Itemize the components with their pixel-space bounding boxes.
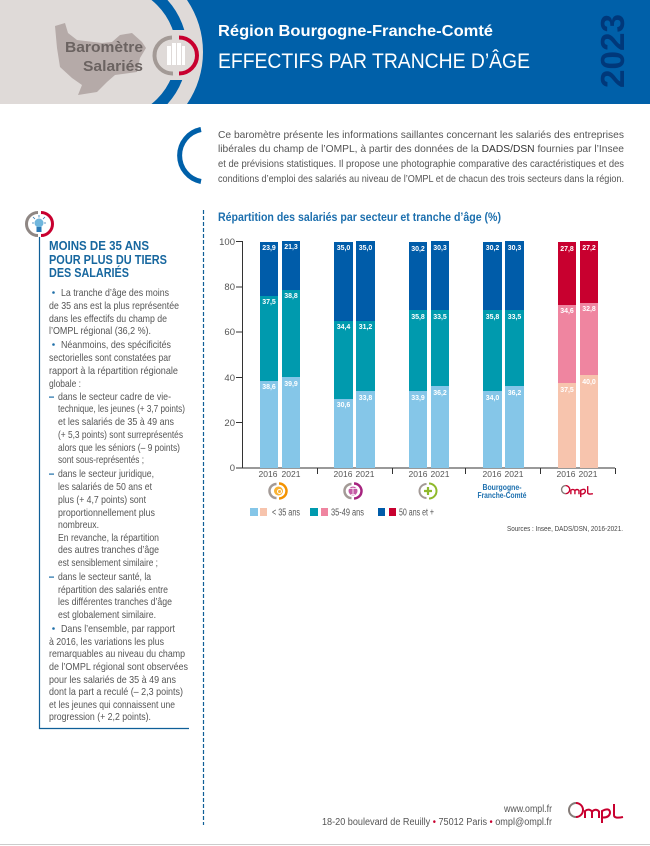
y axis labels: 80 (224, 282, 235, 293)
bars: OMPL: 34,6 (560, 308, 574, 315)
barometer emblem (154, 38, 197, 74)
list item: juridique: nombreux. (58, 520, 99, 531)
bars: santé (409, 241, 449, 468)
bars: cadre de vie: 37,5 (262, 299, 276, 306)
y axis labels: 60 (224, 327, 235, 338)
bars: OMPL: 27,2 (582, 245, 596, 252)
list item: juridique: dans le secteur juridique, (58, 469, 154, 480)
sidebar heading (49, 239, 167, 280)
legend: < 35 ans (272, 508, 300, 518)
bars: juridique: 35,0 (359, 245, 372, 252)
paragraph: overall variation: dont la part a reculé (– 2,3 points) (49, 687, 183, 698)
list item: cadre de vie: alors que les séniors (– 9 points) (58, 443, 180, 454)
region title: Région Bourgogne-Franche-Comté (218, 23, 493, 40)
barometer label: Baromètre (65, 39, 143, 56)
list item: juridique: les salariés de 50 ans et (58, 482, 152, 493)
footer address: 18-20 boulevard de Reuilly • 75012 Paris • ompl@ompl.fr (322, 817, 553, 828)
paragraph: overall variation: pour les salariés de 35 à 49 ans (49, 675, 176, 686)
sidebar heading: POUR PLUS DU TIERS (49, 253, 167, 267)
paragraph: under 35 share: l’OMPL régional (36,2 %). (49, 326, 151, 337)
icon: light bulb (26, 211, 52, 237)
bars: cadre de vie: 21,3 (284, 244, 298, 251)
legend: 50 ans et + (399, 508, 434, 518)
bars: juridique: 35,0 (337, 245, 350, 252)
year labels: 2021 (431, 469, 450, 479)
logo: OMPL chart (562, 486, 593, 497)
y axis labels: 100 (219, 237, 235, 248)
logo: OMPL footer (569, 803, 623, 823)
icon: juridique sector (344, 484, 362, 498)
list item: santé (49, 572, 172, 621)
list item: cadre de vie: technique, les jeunes (+ 3,7 points) (58, 404, 185, 415)
paragraph: under 35 share: La tranche d’âge des moins (61, 288, 169, 299)
label: Bourgogne-Franche-Comté: Franche-Comté (478, 491, 527, 500)
year labels: 2016 (483, 469, 502, 479)
list item: juridique: plus (+ 4,7 points) sont (58, 495, 146, 506)
bars: Bourgogne-Franche-Comté: 30,2 (486, 245, 499, 252)
list item: juridique: proportionnellement plus (58, 508, 155, 519)
bars: juridique: 31,2 (359, 324, 372, 331)
list item: juridique: En revanche, la répartition (58, 533, 159, 544)
footer address: www.ompl.fr (503, 804, 553, 815)
paragraph: sector specifics (49, 340, 178, 390)
bars: juridique: 34,4 (337, 324, 350, 331)
sidebar dashed divider (202, 210, 204, 825)
region map (55, 23, 146, 95)
paragraph: overall variation: de l’OMPL régional sont observées (49, 662, 188, 673)
list item: cadre de vie: dans le secteur cadre de vie- (58, 392, 171, 403)
bars: OMPL: 27,8 (560, 246, 574, 253)
bars: cadre de vie: 39,9 (284, 381, 298, 388)
bars: santé: 30,3 (433, 245, 447, 252)
bars: santé: 33,5 (433, 314, 447, 321)
paragraph: sector specifics: rapport à la répartition régionale (49, 366, 178, 377)
barometer label: Salariés (83, 58, 143, 75)
bars: Bourgogne-Franche-Comté: 33,5 (508, 314, 521, 321)
y axis labels: 0 (230, 463, 235, 474)
main title: EFFECTIFS PAR TRANCHE D’ÂGE (218, 50, 530, 73)
y axis labels (219, 237, 235, 474)
intro text: libérales du champ de l’OMPL, à partir des données de la DADS/DSN fournies par l’Insee (218, 143, 624, 155)
year labels: 2021 (579, 469, 598, 479)
stacked bar chart (219, 237, 616, 479)
list item: santé: dans le secteur santé, la (58, 572, 151, 583)
bars: juridique: 30,6 (337, 402, 350, 409)
paragraph: under 35 share (49, 288, 179, 337)
paragraph: sector specifics: Néanmoins, des spécificités (61, 340, 171, 351)
bars: Bourgogne-Franche-Comté: 35,8 (486, 314, 499, 321)
list item: cadre de vie: et les salariés de 35 à 49 ans (58, 417, 174, 428)
paragraph: sector specifics: sectorielles sont constatées par (49, 353, 172, 364)
paragraph: under 35 share: dans les effectifs du champ de (49, 314, 167, 325)
bars: Bourgogne-Franche-Comté: 30,3 (508, 245, 521, 252)
bars: Bourgogne-Franche-Comté: 36,2 (508, 390, 521, 397)
icon: cadre de vie sector (270, 484, 286, 498)
paragraph: overall variation: à 2016, les variations les plus (49, 637, 164, 648)
list item: santé: les différentes tranches d’âge (58, 597, 172, 608)
intro text (218, 129, 624, 185)
bars: santé: 36,2 (433, 390, 447, 397)
list item: cadre de vie (49, 392, 185, 466)
icon: santé sector (420, 484, 437, 498)
bars: santé: 33,9 (411, 395, 425, 402)
bars: OMPL (558, 241, 598, 468)
list item: santé: répartition des salariés entre (58, 585, 168, 596)
paragraph: overall variation: remarquables au niveau du champ (49, 649, 185, 660)
list item: cadre de vie: sont sous-représentés ; (58, 455, 144, 466)
bars: OMPL: 40,0 (582, 379, 596, 386)
intro bracket (180, 130, 201, 182)
year labels: 2021 (505, 469, 524, 479)
year labels: 2021 (356, 469, 375, 479)
sidebar heading: MOINS DE 35 ANS (49, 239, 149, 253)
bars: OMPL: 37,5 (560, 387, 574, 394)
bars: santé: 30,2 (411, 246, 425, 253)
sources note: Sources : Insee, DADS/DSN, 2016-2021. (507, 526, 623, 533)
paragraph: overall variation: et les jeunes qui connaissent une (49, 700, 175, 711)
header band (0, 0, 650, 104)
bars: Bourgogne-Franche-Comté: 34,0 (486, 395, 499, 402)
sidebar panel (26, 211, 189, 728)
intro text: Ce baromètre présente les informations saillantes concernant les salariés des entreprises (218, 129, 624, 141)
year labels: 2021 (282, 469, 301, 479)
paragraph: overall variation (49, 624, 188, 723)
chart heading: Répartition des salariés par secteur et tranche d’âge (%) (218, 210, 501, 224)
year labels: 2016 (557, 469, 576, 479)
bars: juridique: 33,8 (359, 395, 372, 402)
bars: cadre de vie (260, 241, 300, 468)
legend: 35-49 ans (331, 508, 364, 518)
bottom rule (0, 844, 650, 846)
year: 2023 (594, 14, 631, 88)
bars: cadre de vie: 38,8 (284, 293, 298, 300)
bars: cadre de vie: 38,6 (262, 384, 276, 391)
y axis labels: 40 (224, 373, 235, 384)
bars: Bourgogne-Franche-Comté (483, 241, 524, 468)
label: Bourgogne-Franche-Comté (478, 483, 527, 500)
legend (250, 508, 434, 518)
list item: cadre de vie: (+ 5,3 points) sont surreprésentés (58, 430, 183, 441)
bars: juridique (334, 241, 375, 468)
bars: cadre de vie: 23,9 (262, 245, 276, 252)
list item: santé: est globalement similaire. (58, 610, 156, 621)
list item: juridique: des autres tranches d’âge (58, 545, 159, 556)
sidebar heading: DES SALARIÉS (49, 265, 129, 280)
list item: juridique: est sensiblement similaire ; (58, 558, 158, 569)
list item: juridique (49, 469, 159, 569)
footer address (322, 804, 553, 828)
bars: santé: 35,8 (411, 314, 425, 321)
year labels (259, 469, 598, 479)
bars: OMPL: 32,8 (582, 306, 596, 313)
paragraph: sector specifics: globale : (49, 379, 81, 390)
axes (236, 241, 616, 474)
y axis labels: 20 (224, 418, 235, 429)
paragraph: overall variation: progression (+ 2,2 points). (49, 712, 151, 723)
paragraph: under 35 share: de 35 ans est la plus représentée (49, 301, 179, 312)
paragraph: overall variation: Dans l’ensemble, par rapport (61, 624, 175, 635)
year labels: 2016 (409, 469, 428, 479)
year labels: 2016 (259, 469, 278, 479)
year labels: 2016 (334, 469, 353, 479)
barometer label (66, 41, 142, 71)
label: Bourgogne-Franche-Comté: Bourgogne- (482, 483, 522, 492)
